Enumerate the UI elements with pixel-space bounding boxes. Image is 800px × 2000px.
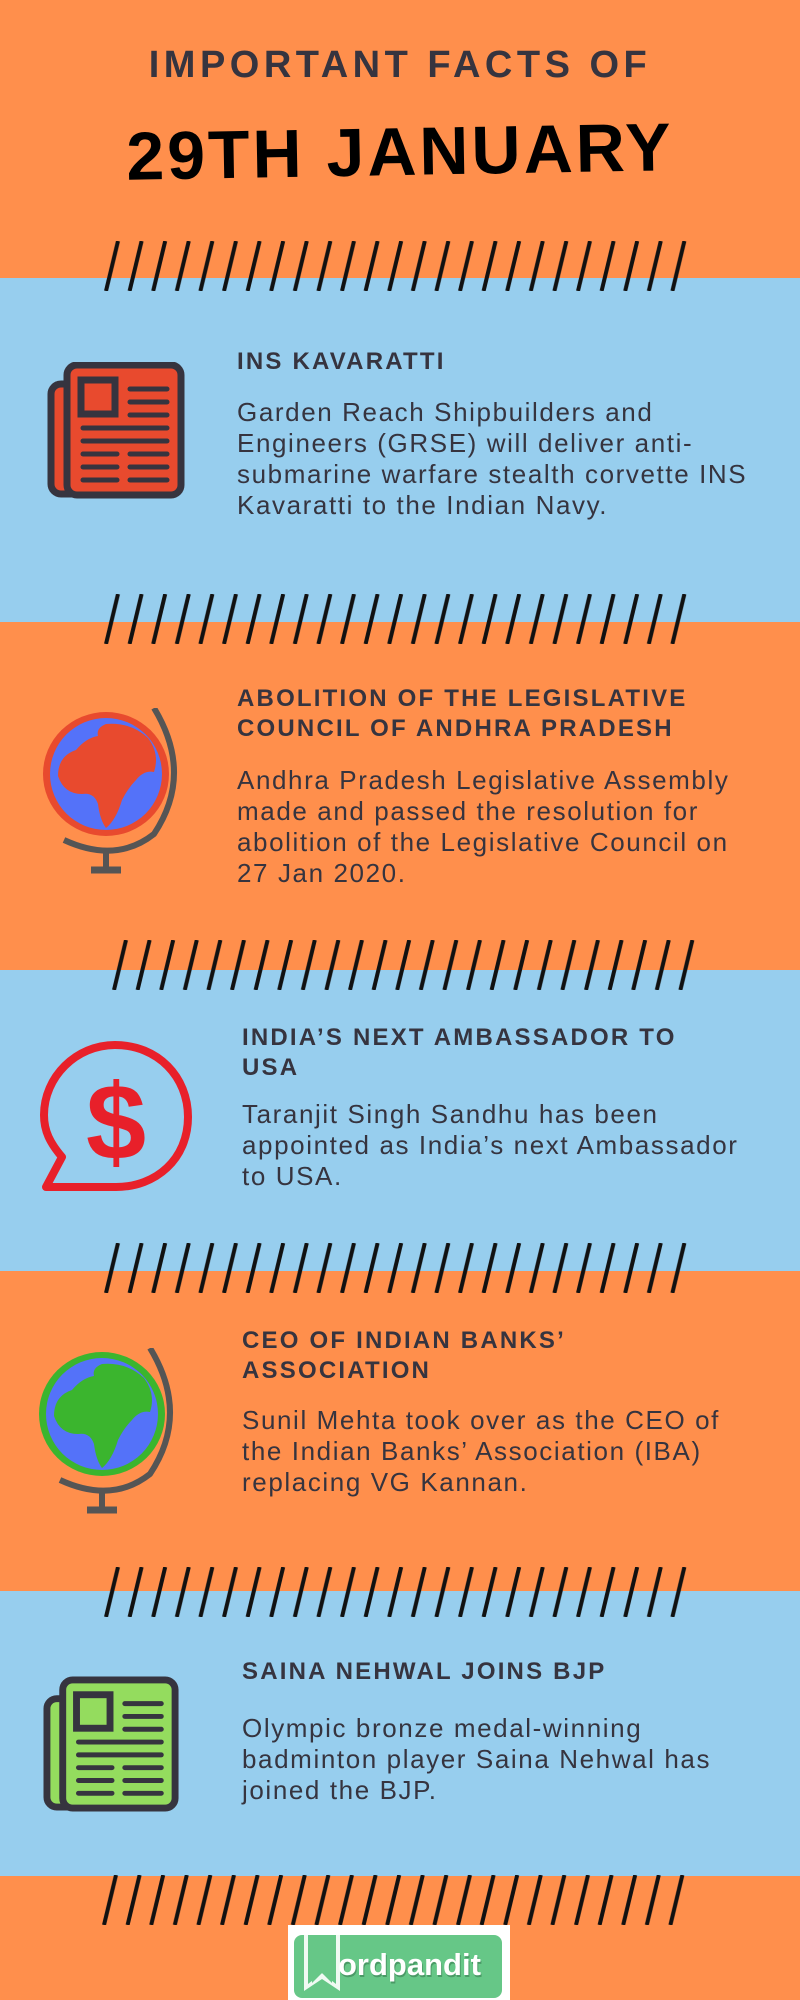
heading: COUNCIL OF ANDHRA PRADESH — [237, 715, 674, 742]
body text: replacing VG Kannan. — [242, 1467, 528, 1497]
body text: Garden Reach Shipbuilders and — [237, 397, 653, 427]
body text: 27 Jan 2020. — [237, 858, 407, 888]
body text — [242, 1405, 720, 1497]
body text: abolition of the Legislative Council on — [237, 827, 729, 857]
icon: bookmark W — [304, 1935, 340, 1991]
panel: India's next ambassador — [40, 1024, 739, 1191]
body text: appointed as India’s next Ambassador — [242, 1130, 739, 1160]
body text: Kavaratti to the Indian Navy. — [237, 490, 608, 520]
icon: dollar speech bubble — [40, 1041, 192, 1191]
heading: SAINA NEHWAL JOINS BJP — [242, 1658, 606, 1685]
title line 1: IMPORTANT FACTS OF — [149, 44, 651, 86]
body text: made and passed the resolution for — [237, 796, 699, 826]
panel: CEO of Indian Banks' Association — [39, 1327, 720, 1514]
logo: wordpandit — [288, 1925, 510, 2000]
heading: INS KAVARATTI — [237, 348, 446, 375]
title line 2: 29TH JANUARY — [126, 109, 674, 195]
body text — [241, 1713, 711, 1805]
heading: USA — [242, 1054, 299, 1081]
body text: submarine warfare stealth corvette INS — [237, 459, 747, 489]
icon: red newspaper — [48, 362, 184, 498]
body text: joined the BJP. — [242, 1775, 438, 1805]
heading — [242, 1024, 677, 1081]
heading — [242, 1327, 566, 1384]
body text — [237, 397, 747, 520]
body text: Taranjit Singh Sandhu has been — [242, 1099, 659, 1129]
icon: red globe — [43, 708, 178, 874]
body text — [237, 765, 729, 888]
title — [126, 44, 674, 195]
icon: green newspaper — [44, 1676, 179, 1812]
body text: to USA. — [242, 1161, 343, 1191]
icon: green globe — [39, 1348, 174, 1514]
body text: Sunil Mehta took over as the CEO of — [242, 1405, 720, 1435]
heading — [237, 685, 688, 742]
body text: Engineers (GRSE) will deliver anti- — [237, 428, 693, 458]
heading: ASSOCIATION — [242, 1357, 431, 1384]
logo: wordpandit: ordpandit — [338, 1947, 481, 1982]
heading: CEO OF INDIAN BANKS’ — [242, 1327, 566, 1354]
body text: Olympic bronze medal-winning — [242, 1713, 642, 1743]
body text: Andhra Pradesh Legislative Assembly — [237, 765, 729, 795]
heading: INDIA’S NEXT AMBASSADOR TO — [242, 1024, 677, 1051]
body text: the Indian Banks’ Association (IBA) — [242, 1436, 702, 1466]
body text — [242, 1099, 739, 1191]
body text: badminton player Saina Nehwal has — [242, 1744, 711, 1774]
heading: ABOLITION OF THE LEGISLATIVE — [237, 685, 688, 712]
panel: INS Kavaratti — [48, 348, 747, 520]
icon: dollar speech bubble: $ — [86, 1061, 146, 1182]
panel: Abolition of Legislative Council — [43, 685, 729, 888]
panel: Saina Nehwal joins BJP — [44, 1658, 711, 1812]
